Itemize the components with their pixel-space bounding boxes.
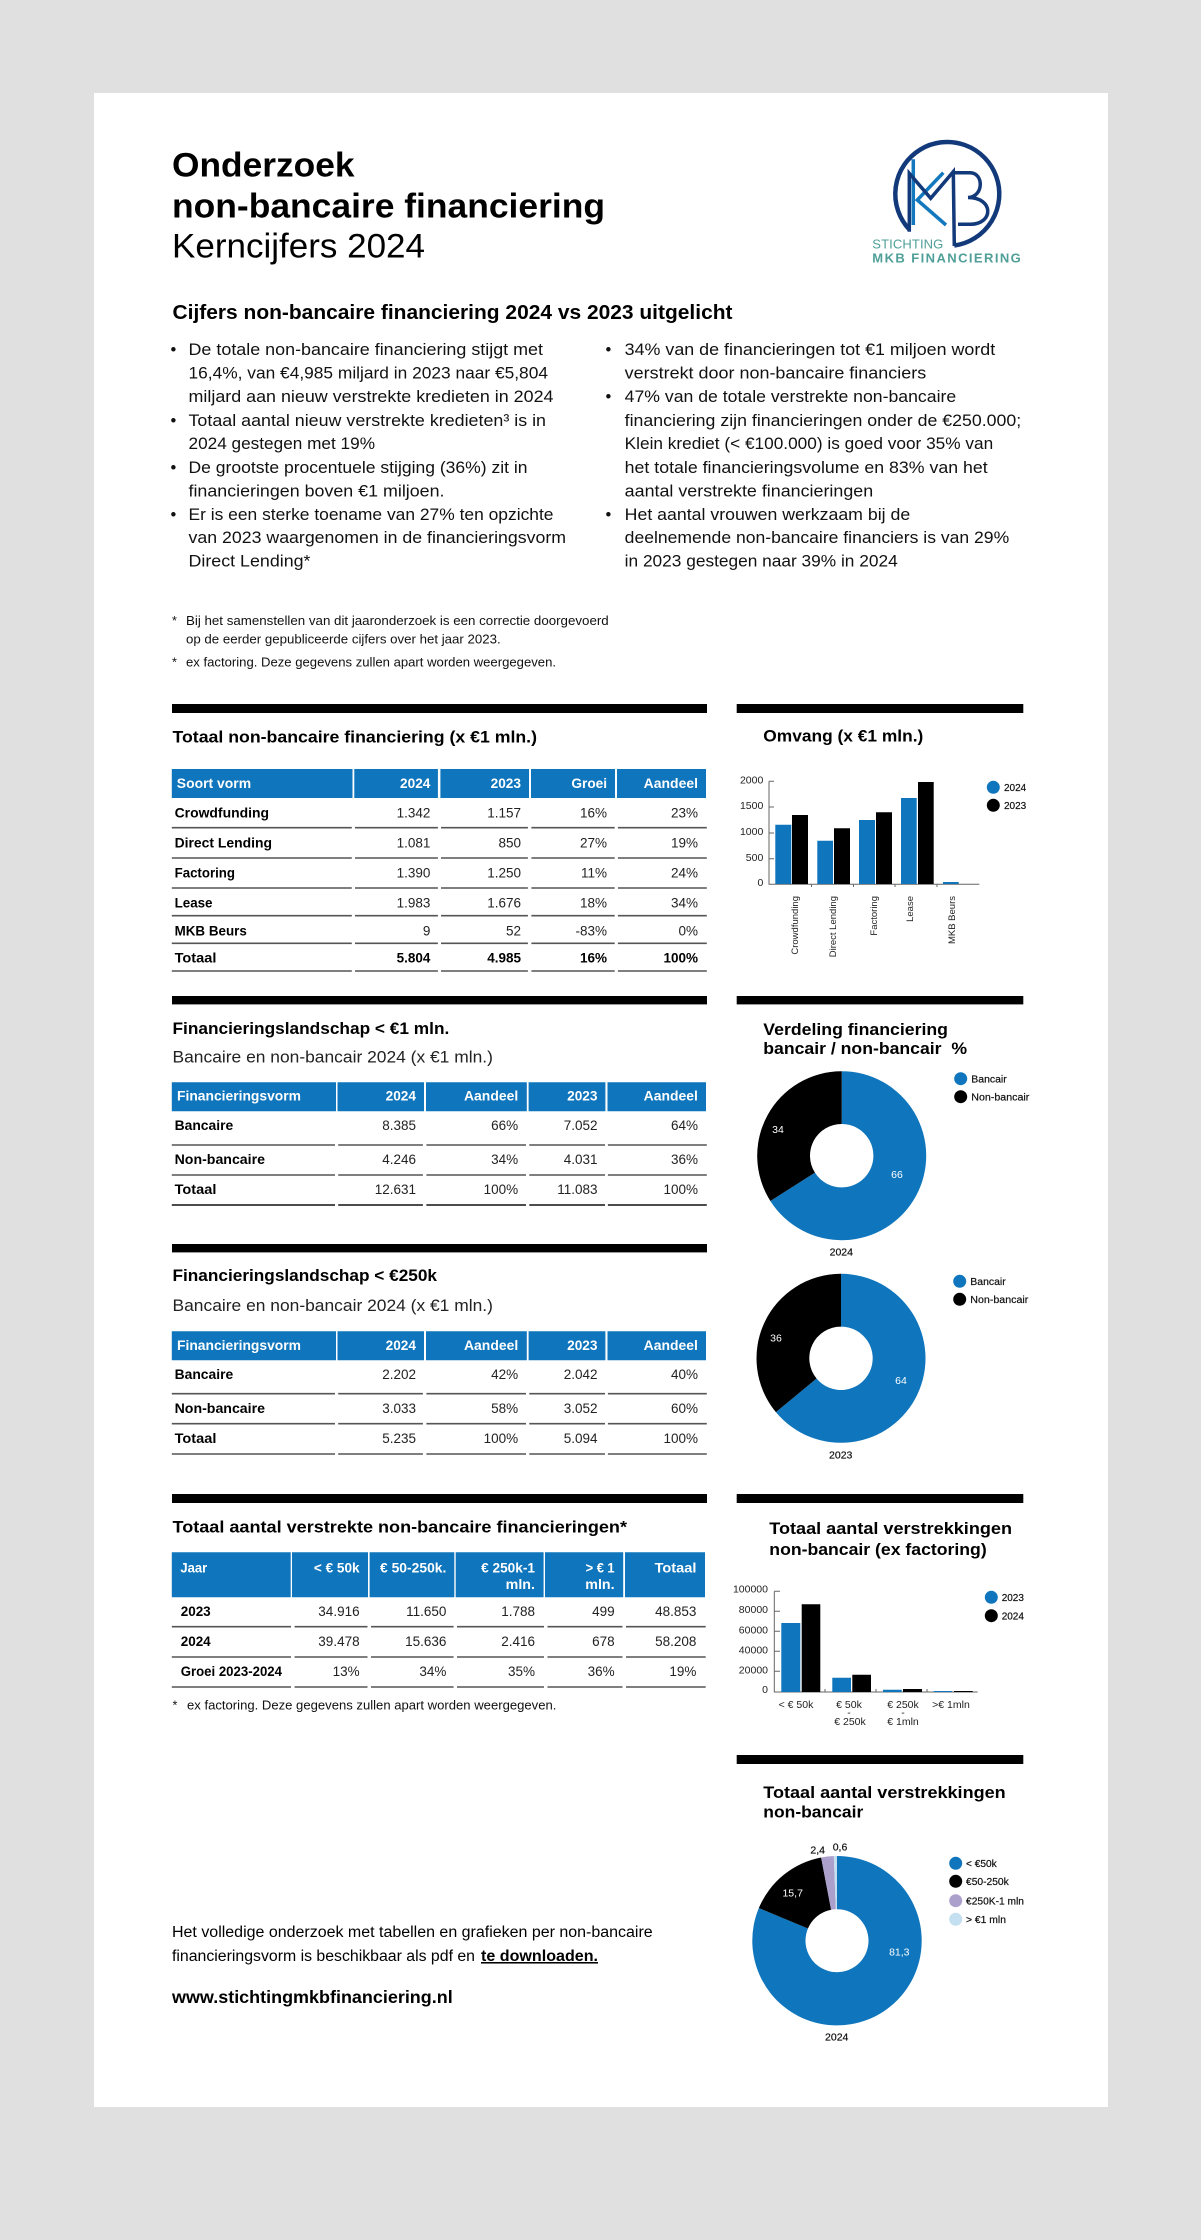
table rows: 1.983 [397,895,430,910]
title block: Kerncijfers 2024 [172,228,425,266]
table rows: Factoring [175,865,235,880]
panel: financieringslandschap < 1 mln table [172,996,707,1205]
table rows: Totaal [175,1182,216,1197]
table rows: Bancaire [175,1118,234,1133]
chart title: Verdeling financiering [763,1020,948,1039]
footnotes: ex factoring. Deze gegevens zullen apart worden weergegeven. [186,656,556,670]
download text [172,1924,653,1965]
table rows: 5.235 [382,1431,416,1446]
bar chart: € 250k [887,1699,920,1711]
table rows: 2.042 [564,1367,598,1382]
table rows: 42% [491,1367,518,1382]
table rows: 58% [491,1401,518,1416]
bullet list right: deelnemende non-bancaire financiers is van 29% [625,529,1010,547]
table header: > € 1 [586,1560,615,1575]
table rows [172,1118,707,1205]
table rows: 100% [663,950,698,965]
table rows: 7.052 [564,1118,598,1133]
bar chart: 40000 [739,1645,768,1657]
bullet list left [170,341,566,571]
table rows: 64% [671,1118,698,1133]
table rows [172,1604,706,1687]
table rows: 36% [671,1152,698,1167]
bar chart: 60000 [739,1625,768,1637]
chart title: non-bancair [763,1802,864,1821]
white page panel [94,93,1108,2107]
table header [172,1552,705,1597]
download text: te downloaden. [481,1948,598,1965]
table rows: Crowdfunding [175,805,269,820]
chart title: Totaal aantal verstrekkingen [763,1783,1006,1802]
bullet list right: • [606,506,612,524]
panel: financieringslandschap < 250k table [172,1244,707,1454]
table rows: 499 [592,1604,615,1619]
bullet list left: 16,4%, van €4,985 miljard in 2023 naar €5,804 [188,364,548,382]
table rows: 1.081 [397,835,430,850]
bullet list left: De grootste procentuele stijging (36%) zit in [188,459,528,477]
table rows: 16% [580,950,607,965]
table rows: 850 [498,835,521,850]
donut chart 2024: 81,3 [889,1946,910,1958]
legend: > €1 mln [966,1915,1006,1926]
panel: totaal aantal verstrekkingen bar chart [733,1494,1024,1728]
table rows: 100% [484,1182,518,1197]
donut chart 2024: 2024 [830,1246,853,1258]
bullet list right: het totale financieringsvolume en 83% van het [625,459,988,477]
bar chart: - [901,1707,905,1719]
bullet list right: financiering zijn financieringen onder de €250.000; [625,412,1021,430]
donut chart 2023: 2023 [829,1450,853,1462]
table footnote: * [172,1698,178,1712]
table rows: 39.478 [318,1634,360,1649]
download text: financieringsvorm is beschikbaar als pdf en [172,1948,475,1965]
table rows: 1.157 [487,805,521,820]
chart title: bancair / non-bancair % [763,1039,967,1058]
table header: 2023 [491,776,521,791]
table rows: 1.788 [501,1604,535,1619]
legend 2024 [954,1072,1030,1104]
table header: mln. [585,1577,615,1592]
table header: Soort vorm [177,776,251,791]
bar chart: >€ 1mln [932,1699,970,1711]
bar chart: Factoring [869,896,880,936]
legend 2023: Bancair [970,1277,1006,1288]
heading: cijfers uitgelicht: Cijfers non-bancaire financiering 2024 vs 2023 uitgelicht [172,302,733,324]
download text: Het volledige onderzoek met tabellen en grafieken per non-bancaire [172,1924,653,1941]
bar chart: Lease [905,896,916,922]
bullet list right: aantal verstrekte financieringen [625,482,873,500]
legend [985,1591,1024,1622]
table rows: 23% [671,805,698,820]
table header: € 250k-1 [481,1560,535,1575]
table rows: 11.650 [406,1604,446,1619]
table rows: 58.208 [655,1634,696,1649]
bullet list left: Totaal aantal nieuw verstrekte kredieten³ is in [188,412,546,430]
heading: Totaal aantal verstrekte non-bancaire financieringen* [172,1517,627,1536]
bullet list left: Direct Lending* [188,553,311,571]
donut chart 2024: 0,6 [833,1842,847,1854]
table rows: Lease [175,895,213,910]
bar chart: 0 [762,1684,768,1696]
bullet list left: van 2023 waargenomen in de financieringsvorm [188,529,566,547]
table rows: 4.985 [487,950,521,965]
donut chart 2023: 36 [770,1332,782,1344]
chart title [769,1519,1012,1559]
donut chart 2024 [757,1071,926,1258]
chart title [763,1020,967,1058]
table footnote: ex factoring. Deze gegevens zullen apart worden weergegeven. [187,1698,556,1712]
table rows: Non-bancaire [175,1401,266,1416]
bar chart: Direct Lending [828,896,839,957]
table rows: 100% [663,1182,698,1197]
bullet list left: • [170,506,176,524]
table header: 2024 [386,1338,416,1353]
heading: Financieringslandschap < €250k [172,1266,438,1285]
table rows: 1.390 [397,865,430,880]
table rows: 2.202 [382,1367,416,1382]
footnotes [172,614,609,670]
table rows: 2023 [181,1604,211,1619]
table header: Totaal [655,1560,696,1575]
bullet list right: 34% van de financieringen tot €1 miljoen wordt [625,341,996,359]
table rows: Totaal [175,950,216,965]
table rows: 1.676 [487,895,521,910]
bar chart: 0 [757,877,763,889]
bar chart: MKB Beurs [947,896,958,944]
bar chart [733,1584,978,1728]
heading: Totaal non-bancaire financiering (x €1 mln.) [172,727,537,746]
table rows: 52 [506,923,521,938]
donut chart 2024: 15,7 [782,1888,803,1900]
table rows: 4.246 [382,1152,416,1167]
bar chart: 100000 [733,1584,768,1596]
bullet list right: 47% van de totale verstrekte non-bancaire [625,388,956,406]
bar chart: 500 [746,852,763,864]
logo: Stichting MKB Financiering [872,142,1021,265]
bullet list right [606,341,1021,571]
table header: Financieringsvorm [177,1338,301,1353]
table rows: 9 [423,923,430,938]
table rows: 11% [581,865,607,880]
table header [172,1331,706,1360]
table rows: 11.083 [557,1182,598,1197]
table rows: 18% [580,895,607,910]
bullet list right: in 2023 gestegen naar 39% in 2024 [625,553,898,571]
footnotes: op de eerder gepubliceerde cijfers over het jaar 2023. [186,632,501,646]
bullet list left: Er is een sterke toename van 27% ten opzichte [188,506,554,524]
table header: € 50-250k. [380,1560,446,1575]
bullet list right: verstrekt door non-bancaire financiers [625,364,926,382]
table header: Aandeel [644,1338,698,1353]
table header: 2024 [400,776,431,791]
table header: Groei [571,776,607,791]
bar chart: Crowdfunding [790,896,801,955]
logo: Stichting MKB Financiering: STICHTING [872,236,943,251]
legend: €50-250k [966,1877,1010,1888]
bullet list right: Het aantal vrouwen werkzaam bij de [625,506,910,524]
bar chart [740,774,979,957]
table rows: 678 [592,1634,615,1649]
table rows: 24% [671,865,698,880]
table rows: 19% [669,1664,696,1679]
bullet list right: • [606,341,612,359]
table header: Aandeel [644,1089,698,1104]
subheading: Bancaire en non-bancair 2024 (x €1 mln.) [172,1048,493,1066]
footnotes: Bij het samenstellen van dit jaaronderzoek is een correctie doorgevoerd [186,614,609,628]
table rows: 8.385 [382,1118,416,1133]
table rows: 34.916 [318,1604,360,1619]
bar chart: 1500 [740,800,763,812]
table header: Financieringsvorm [177,1089,301,1104]
bar chart: € 1mln [887,1716,919,1728]
table rows: Bancaire [175,1367,234,1382]
table rows: 60% [671,1401,698,1416]
subheading: Bancaire en non-bancair 2024 (x €1 mln.) [172,1297,493,1315]
legend: 2023 [1002,1593,1024,1604]
legend 2023: Non-bancair [970,1295,1029,1306]
legend: 2023 [1004,801,1027,812]
table header: 2024 [386,1089,416,1104]
table rows: 100% [484,1431,518,1446]
table header: 2023 [567,1089,598,1104]
table rows: 48.853 [655,1604,696,1619]
table rows: 0% [678,923,698,938]
bullet list left: financieringen boven €1 miljoen. [188,482,444,500]
table rows: 13% [333,1664,360,1679]
chart title: Totaal aantal verstrekkingen [769,1519,1012,1538]
table rows: 35% [508,1664,535,1679]
bullet list left: • [170,459,176,477]
table header: 2023 [567,1338,598,1353]
table rows: 3.052 [564,1401,598,1416]
chart title: non-bancair (ex factoring) [769,1540,987,1559]
bar chart: < € 50k [779,1699,814,1711]
table rows: Direct Lending [175,835,272,850]
donut chart 2023: 64 [895,1375,907,1387]
table header: < € 50k [314,1560,360,1575]
legend: < €50k [966,1859,998,1870]
bar chart: 80000 [739,1604,768,1616]
table rows: 36% [588,1664,615,1679]
title block [172,147,605,266]
table rows: 15.636 [405,1634,446,1649]
table rows: 16% [580,805,607,820]
donut chart 2023 [757,1274,926,1462]
table header: Aandeel [464,1089,518,1104]
table rows: 2.416 [501,1634,535,1649]
bar chart: € 50k [836,1699,863,1711]
footnotes: * [172,614,177,628]
donut chart 2024: 34 [772,1124,784,1136]
legend: 2024 [1004,783,1027,794]
bullet list left: • [170,341,176,359]
legend: 2024 [1002,1611,1024,1622]
panel: totaal non-bancaire financiering table [172,704,707,971]
bar chart: - [847,1707,851,1719]
bullet list left: De totale non-bancaire financiering stijgt met [188,341,543,359]
table rows: 5.094 [564,1431,598,1446]
website url: www.stichtingmkbfinanciering.nl [171,1987,453,2007]
panel: omvang bar chart [737,704,1027,957]
table rows: Non-bancaire [175,1152,266,1167]
legend [949,1857,1024,1926]
title block: non-bancaire financiering [172,187,605,225]
chart title: Omvang (x €1 mln.) [763,727,923,746]
table rows [172,1367,707,1454]
table rows [172,805,707,971]
table rows: 1.250 [487,865,521,880]
bullet list right: • [606,388,612,406]
table header: Aandeel [644,776,698,791]
table header: Jaar [180,1560,208,1575]
table rows: Groei 2023-2024 [181,1664,282,1679]
bar chart: 1000 [740,826,763,838]
bar chart: € 250k [834,1716,867,1728]
legend 2023 [953,1275,1029,1306]
table rows: 100% [663,1431,698,1446]
table rows: 4.031 [564,1152,598,1167]
table rows: 34% [671,895,698,910]
legend 2024: Bancair [971,1074,1007,1086]
donut chart 2024: 2024 [825,2032,849,2044]
title block: Onderzoek [172,147,355,185]
table rows: 34% [491,1152,518,1167]
table rows: 19% [671,835,698,850]
donut chart 2024 [752,1842,922,2044]
legend 2024: Non-bancair [971,1092,1030,1104]
table header: mln. [506,1577,535,1592]
table rows: 1.342 [397,805,430,820]
table rows: 40% [671,1367,698,1382]
table header [172,769,706,798]
bar chart: 2000 [740,774,763,786]
table rows: 66% [491,1118,518,1133]
bullet list right: Klein krediet (< €100.000) is goed voor 35% van [625,435,993,453]
footnotes: * [172,656,177,670]
bar chart: 20000 [739,1665,768,1677]
bullet list left: • [170,412,176,430]
panel: totaal aantal verstrekkingen donut chart [737,1755,1024,2044]
table header: Aandeel [464,1338,518,1353]
legend: €250K-1 mln [966,1896,1024,1907]
table header [172,1082,706,1111]
table rows: 3.033 [382,1401,416,1416]
heading: Financieringslandschap < €1 mln. [172,1019,449,1038]
table rows: 12.631 [375,1182,416,1197]
legend [987,781,1027,812]
table rows: 5.804 [397,950,431,965]
panel: totaal aantal verstrekte financieringen table [172,1494,707,1712]
table rows: 2024 [181,1634,211,1649]
table rows: 27% [580,835,607,850]
table rows: -83% [575,923,607,938]
table rows: Totaal [175,1431,216,1446]
bullet list left: miljard aan nieuw verstrekte kredieten in 2024 [188,388,554,406]
panel: verdeling financiering donut charts [737,996,1030,1462]
chart title [763,1783,1006,1821]
bullet list left: 2024 gestegen met 19% [188,435,375,453]
table rows: 34% [419,1664,446,1679]
donut chart 2024: 66 [891,1169,903,1181]
donut chart 2024: 2,4 [810,1845,825,1857]
table rows: MKB Beurs [175,923,247,938]
logo: Stichting MKB Financiering: MKB FINANCIERING [872,250,1021,265]
